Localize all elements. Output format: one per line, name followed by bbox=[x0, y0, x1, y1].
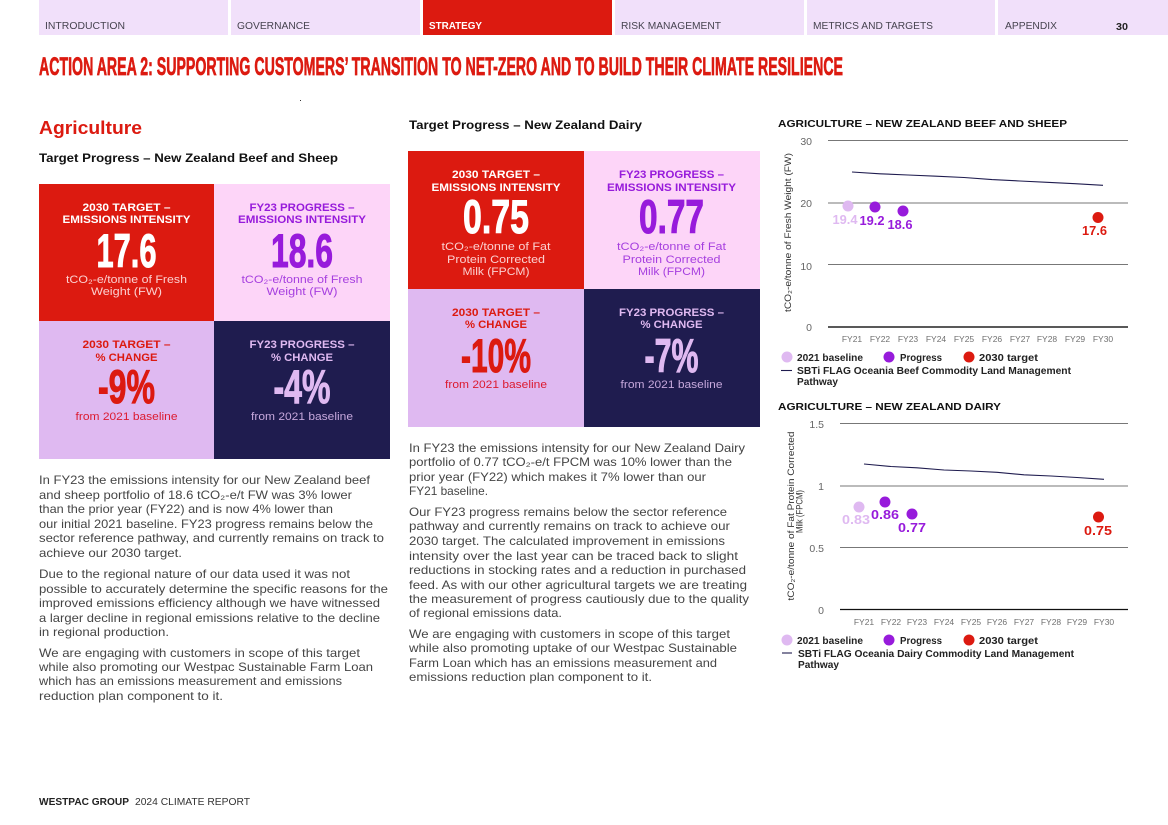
navigation bar: APPENDIX bbox=[1005, 21, 1057, 32]
text block: beef and sheep commentary: possible to accurately determine the specific reasons for the bbox=[39, 583, 388, 596]
text block: beef and sheep commentary: reduction plan component to it. bbox=[39, 690, 223, 703]
x axis labels: FY23 bbox=[907, 617, 927, 627]
legend bbox=[782, 634, 1075, 671]
card: dairy FY23 progress emissions intensity: Protein Corrected bbox=[622, 254, 720, 266]
x axis labels: FY21 bbox=[854, 617, 874, 627]
data points and values: 19.4 bbox=[832, 213, 858, 227]
y axis ticks: 0 bbox=[818, 605, 824, 617]
x axis labels: FY22 bbox=[870, 334, 890, 344]
navigation bar: GOVERNANCE bbox=[237, 21, 310, 32]
text block: dairy commentary: Our FY23 progress remains below the sector reference bbox=[409, 506, 727, 519]
card: FY23 progress emissions intensity: EMISSIONS INTENSITY bbox=[238, 214, 367, 226]
x axis labels: FY21 bbox=[842, 334, 862, 344]
legend: 2030 target bbox=[979, 353, 1039, 364]
x axis labels: FY23 bbox=[898, 334, 918, 344]
x axis labels: FY24 bbox=[934, 617, 954, 627]
legend: 2021 baseline bbox=[797, 636, 863, 647]
card: dairy 2030 target emissions intensity: tCO₂-e/tonne of Fat bbox=[442, 241, 551, 253]
footer: 2024 CLIMATE REPORT bbox=[135, 797, 250, 808]
chart title: beef and sheep: AGRICULTURE – NEW ZEALAND BEEF AND SHEEP bbox=[778, 118, 1067, 130]
card: dairy 2030 target percent change: 2030 TARGET – bbox=[452, 307, 540, 319]
y axis ticks: 1 bbox=[818, 481, 824, 493]
navigation bar: INTRODUCTION bbox=[45, 21, 125, 32]
card: FY23 progress percent change: from 2021 baseline bbox=[251, 411, 353, 423]
heading: beef and sheep target progress: Target Progress – New Zealand Beef and Sheep bbox=[39, 151, 338, 165]
x axis labels: FY26 bbox=[987, 617, 1007, 627]
legend: 2021 baseline bbox=[797, 353, 863, 364]
card: dairy 2030 target emissions intensity: Milk (FPCM) bbox=[462, 266, 530, 278]
panel: dairy KPI grid bbox=[408, 151, 760, 427]
navigation bar: STRATEGY bbox=[429, 21, 482, 32]
card: 2030 target percent change bbox=[39, 321, 214, 459]
text block: beef and sheep commentary: Due to the regional nature of our data used it was not bbox=[39, 568, 351, 581]
card: dairy FY23 progress percent change: from 2021 baseline bbox=[620, 379, 722, 391]
navigation bar: 30 bbox=[1116, 22, 1128, 33]
text block: beef and sheep commentary bbox=[38, 474, 388, 703]
footer: WESTPAC GROUP bbox=[39, 797, 129, 808]
card: FY23 progress emissions intensity bbox=[214, 184, 390, 321]
text block: dairy commentary: We are engaging with customers in scope of this target bbox=[409, 628, 731, 641]
text block: beef and sheep commentary: in regional production. bbox=[39, 626, 169, 639]
text block: beef and sheep commentary: We are engaging with customers in scope of this target bbox=[39, 647, 361, 660]
text block: beef and sheep commentary: our initial 2021 baseline. FY23 progress remains below the bbox=[39, 518, 373, 531]
footer bbox=[39, 797, 250, 808]
card: FY23 progress emissions intensity: 18.6 bbox=[271, 224, 333, 277]
panel: beef and sheep KPI grid bbox=[39, 184, 390, 459]
data points and values bbox=[842, 496, 1112, 538]
card: FY23 progress emissions intensity: tCO₂-e/tonne of Fresh bbox=[242, 274, 362, 286]
card: 2030 target emissions intensity: 2030 TARGET – bbox=[82, 202, 170, 214]
x axis labels: FY25 bbox=[954, 334, 974, 344]
chart: dairy emissions intensity bbox=[778, 401, 1128, 671]
x axis labels: FY30 bbox=[1094, 617, 1114, 627]
card: FY23 progress percent change: FY23 PROGRESS – bbox=[250, 339, 354, 351]
legend: Progress bbox=[900, 353, 942, 364]
chart: beef and sheep emissions intensity bbox=[778, 118, 1128, 388]
card: 2030 target percent change: from 2021 baseline bbox=[76, 411, 178, 423]
text block: beef and sheep commentary: sector reference pathway, and currently remains on track to bbox=[39, 532, 384, 545]
pathway line bbox=[864, 464, 1104, 479]
data points and values: 0.75 bbox=[1084, 524, 1112, 538]
y axis ticks bbox=[809, 419, 824, 617]
card: dairy FY23 progress emissions intensity: 0.77 bbox=[639, 190, 704, 243]
data points and values: 0.77 bbox=[898, 521, 926, 535]
chart title: dairy: AGRICULTURE – NEW ZEALAND DAIRY bbox=[778, 401, 1001, 413]
text block: dairy commentary: pathway and currently remains on track to achieve our bbox=[409, 520, 730, 533]
text block: dairy commentary: prior year (FY22) which makes it 7% lower than our bbox=[409, 471, 706, 484]
text block: beef and sheep commentary: improved emissions efficiency although we have witnessed bbox=[39, 597, 380, 610]
y axis ticks: 1.5 bbox=[809, 419, 824, 431]
legend: Pathway bbox=[798, 660, 839, 671]
card: dairy FY23 progress emissions intensity: EMISSIONS INTENSITY bbox=[607, 182, 737, 194]
y axis label bbox=[786, 431, 804, 600]
card: dairy 2030 target emissions intensity: EMISSIONS INTENSITY bbox=[432, 182, 561, 194]
navigation bar: RISK MANAGEMENT bbox=[621, 21, 721, 32]
y axis label: Milk (FPCM) bbox=[794, 490, 804, 533]
x axis labels bbox=[854, 617, 1114, 627]
card: FY23 progress percent change bbox=[214, 321, 390, 459]
card: dairy FY23 progress emissions intensity: FY23 PROGRESS – bbox=[619, 169, 724, 181]
card: dairy 2030 target emissions intensity bbox=[408, 151, 584, 289]
data points and values: 0.83 bbox=[842, 513, 870, 527]
text block: dairy commentary: portfolio of 0.77 tCO₂-e/t FPCM was 10% lower than the bbox=[409, 456, 732, 469]
data points and values: 17.6 bbox=[1082, 224, 1107, 238]
text block: dairy commentary: Farm Loan which has an emissions measurement and bbox=[409, 657, 717, 670]
text block: beef and sheep commentary: achieve our 2030 target. bbox=[39, 547, 182, 560]
card: FY23 progress emissions intensity: FY23 PROGRESS – bbox=[250, 202, 354, 214]
text block: dairy commentary: 2030 target. The calculated improvement in emissions bbox=[409, 535, 725, 548]
y axis ticks bbox=[800, 136, 812, 334]
y axis label: tCO₂-e/tonne of Fat Protein Corrected bbox=[786, 431, 796, 601]
card: dairy 2030 target percent change: % CHANGE bbox=[465, 319, 527, 331]
x axis labels: FY24 bbox=[926, 334, 946, 344]
section heading: Agriculture: Agriculture bbox=[39, 118, 142, 138]
x axis labels: FY27 bbox=[1014, 617, 1034, 627]
card: 2030 target percent change: % CHANGE bbox=[96, 352, 158, 364]
card: dairy FY23 progress percent change: -7% bbox=[644, 329, 698, 382]
x axis labels bbox=[842, 334, 1113, 344]
y axis ticks: 0.5 bbox=[809, 543, 824, 555]
legend bbox=[781, 352, 1072, 388]
card: dairy FY23 progress percent change bbox=[584, 289, 760, 427]
card: 2030 target emissions intensity: EMISSIONS INTENSITY bbox=[62, 214, 191, 226]
y axis ticks: 20 bbox=[800, 198, 812, 210]
card: 2030 target emissions intensity: 17.6 bbox=[96, 224, 156, 277]
x axis labels: FY25 bbox=[961, 617, 981, 627]
text block: beef and sheep commentary: which has an emissions measurement and emissions bbox=[38, 675, 342, 688]
text block: dairy commentary: emissions reduction plan component to it. bbox=[409, 671, 652, 684]
text block: dairy commentary: feed. As with our other agricultural targets we are treating bbox=[409, 579, 747, 592]
data points and values bbox=[832, 200, 1107, 238]
data points and values: 19.2 bbox=[860, 214, 885, 228]
card: FY23 progress percent change: % CHANGE bbox=[271, 352, 333, 364]
text block: dairy commentary: the measurement of progress cautiously due to the quality bbox=[409, 593, 749, 606]
text block: beef and sheep commentary: a larger decline in regional emissions relative to the decline bbox=[39, 612, 380, 625]
text block: beef and sheep commentary: In FY23 the emissions intensity for our New Zealand beef bbox=[39, 474, 371, 487]
text block: dairy commentary: In FY23 the emissions intensity for our New Zealand Dairy bbox=[409, 442, 745, 455]
card: 2030 target emissions intensity bbox=[39, 184, 214, 321]
card: dairy FY23 progress percent change: FY23 PROGRESS – bbox=[619, 307, 724, 319]
card: 2030 target emissions intensity: tCO₂-e/tonne of Fresh bbox=[66, 274, 187, 286]
x axis labels: FY29 bbox=[1065, 334, 1085, 344]
text block: beef and sheep commentary: than the prior year (FY22) and is now 4% lower than bbox=[39, 503, 333, 516]
x axis labels: FY28 bbox=[1037, 334, 1057, 344]
card: dairy FY23 progress emissions intensity: Milk (FPCM) bbox=[638, 266, 705, 278]
card: dairy FY23 progress percent change: % CHANGE bbox=[640, 319, 702, 331]
x axis labels: FY22 bbox=[881, 617, 901, 627]
legend: SBTi FLAG Oceania Beef Commodity Land Management bbox=[797, 366, 1072, 377]
text block: beef and sheep commentary: and sheep portfolio of 18.6 tCO₂-e/t FW was 3% lower bbox=[39, 489, 352, 502]
x axis labels: FY30 bbox=[1093, 334, 1113, 344]
data points and values: 0.86 bbox=[871, 508, 899, 522]
card: dairy 2030 target percent change bbox=[408, 289, 584, 427]
x axis labels: FY26 bbox=[982, 334, 1002, 344]
card: 2030 target percent change: -9% bbox=[98, 360, 155, 413]
card: FY23 progress emissions intensity: Weight (FW) bbox=[266, 286, 338, 298]
text block: beef and sheep commentary: while also promoting our Westpac Sustainable Farm Loan bbox=[38, 661, 373, 674]
card: dairy 2030 target emissions intensity: 0.75 bbox=[463, 190, 529, 243]
x axis labels: FY29 bbox=[1067, 617, 1087, 627]
text block: dairy commentary: of regional emissions data. bbox=[409, 607, 562, 620]
card: dairy 2030 target percent change: from 2021 baseline bbox=[445, 379, 547, 391]
text block: dairy commentary: while also promoting uptake of our Westpac Sustainable bbox=[408, 642, 737, 655]
card: 2030 target emissions intensity: Weight (FW) bbox=[91, 286, 162, 298]
legend: SBTi FLAG Oceania Dairy Commodity Land Management bbox=[798, 649, 1075, 660]
card: dairy FY23 progress emissions intensity: tCO₂-e/tonne of Fat bbox=[617, 241, 727, 253]
y axis ticks: 10 bbox=[800, 261, 812, 273]
y axis ticks: 30 bbox=[800, 136, 812, 148]
navigation bar: METRICS AND TARGETS bbox=[813, 21, 933, 32]
navigation bar bbox=[39, 0, 1168, 35]
legend: Progress bbox=[900, 636, 942, 647]
card: dairy 2030 target emissions intensity: 2030 TARGET – bbox=[452, 169, 540, 181]
card: FY23 progress percent change: -4% bbox=[274, 360, 330, 413]
heading: dairy target progress: Target Progress – New Zealand Dairy bbox=[409, 118, 642, 132]
y axis ticks: 0 bbox=[806, 322, 812, 334]
x axis labels: FY28 bbox=[1041, 617, 1061, 627]
x axis labels: FY27 bbox=[1010, 334, 1030, 344]
card: dairy FY23 progress emissions intensity bbox=[584, 151, 760, 289]
pathway line bbox=[852, 172, 1103, 185]
data points and values: 18.6 bbox=[888, 218, 913, 232]
text block: dairy commentary bbox=[408, 442, 749, 684]
card: dairy 2030 target emissions intensity: Protein Corrected bbox=[447, 254, 545, 266]
legend: 2030 target bbox=[979, 636, 1039, 647]
card: dairy 2030 target percent change: -10% bbox=[461, 329, 531, 382]
card: 2030 target percent change: 2030 TARGET – bbox=[82, 339, 170, 351]
text block: dairy commentary: FY21 baseline. bbox=[409, 485, 488, 498]
text block: dairy commentary: intensity over the last year can be traced back to slight bbox=[409, 550, 739, 563]
legend: Pathway bbox=[797, 377, 838, 388]
y axis label: tCO₂-e/tonne of Fresh Weight (FW) bbox=[783, 153, 793, 312]
text block: dairy commentary: reductions in stocking rates and a reduction in purchased bbox=[409, 564, 746, 577]
